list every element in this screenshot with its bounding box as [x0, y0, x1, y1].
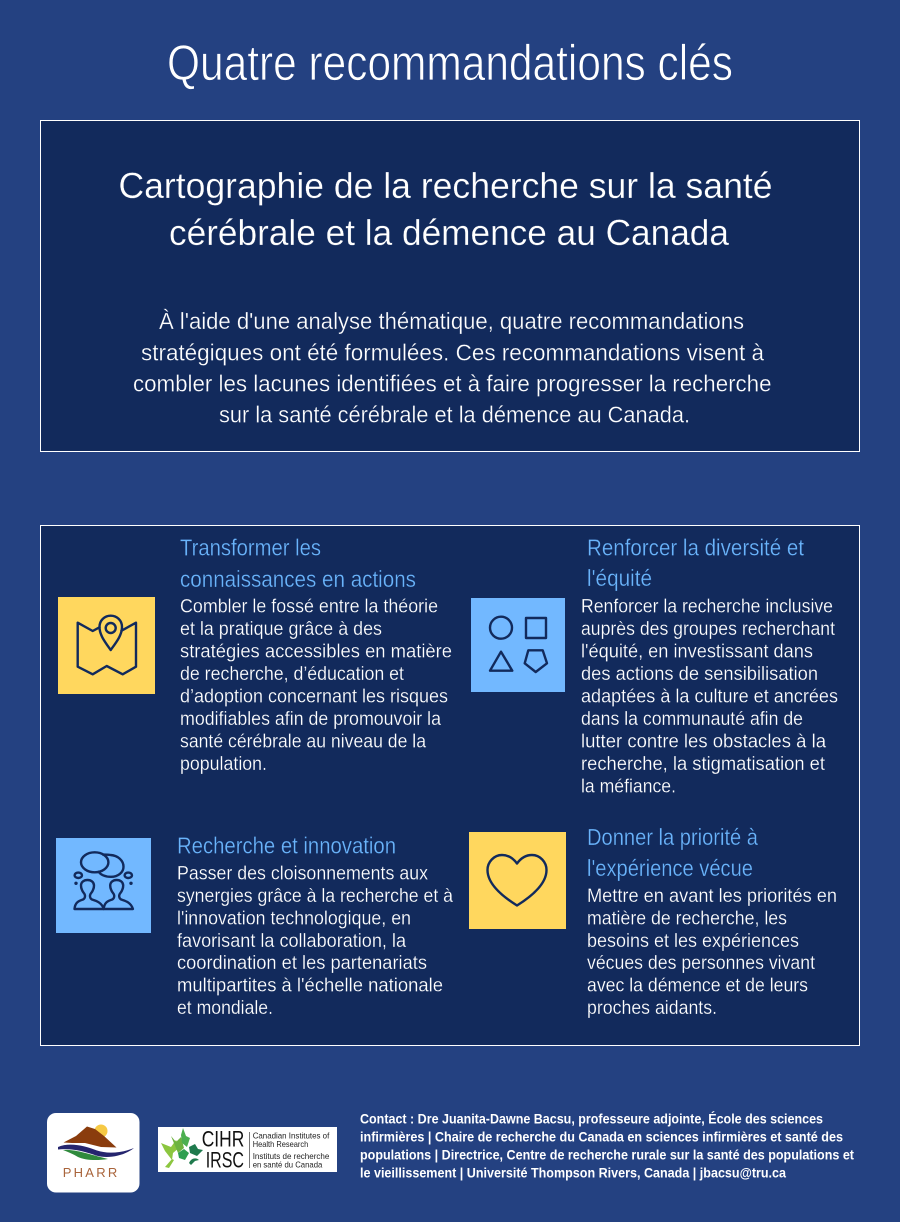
logo: PHARR: [47, 1113, 140, 1192]
text: recherche et innovation: coordination et les partenariats: [177, 952, 427, 974]
heading: expérience vécue: [587, 824, 759, 881]
text: diversité: lutter contre les obstacles à la: [581, 730, 826, 752]
recommendation 4: [469, 824, 837, 1019]
text: expérience vécue: proches aidants.: [587, 997, 717, 1019]
panel heading: [118, 165, 772, 253]
heading: expérience vécue: l'expérience vécue: [587, 855, 753, 881]
heading: transformer: connaissances en actions: [180, 566, 416, 592]
text: transformer: stratégies accessibles en matière: [180, 640, 452, 662]
text: transformer: [180, 596, 452, 775]
text: diversité: auprès des groupes recherchant: [581, 618, 836, 640]
text: expérience vécue: avec la démence et de leurs: [587, 974, 808, 996]
logo: CIHR IRSC: CIHR: [202, 1127, 244, 1152]
logo: CIHR IRSC: Instituts de recherche: [253, 1151, 330, 1161]
text: transformer: population.: [180, 753, 267, 775]
text: expérience vécue: [587, 885, 837, 1019]
heading: transformer: Transformer les: [180, 534, 321, 560]
text: expérience vécue: vécues des personnes vivant: [587, 952, 816, 974]
intro text block: À l'aide d'une analyse thématique, quatre recommandations: [159, 308, 744, 334]
panel heading: Cartographie de la recherche sur la santé: [118, 165, 772, 206]
contact text: [360, 1112, 854, 1180]
heading: diversité: l'équité: [587, 565, 652, 591]
icon: shapes: [471, 598, 565, 692]
title: Quatre recommandations clés: [167, 35, 733, 91]
text: diversité: dans la communauté afin de: [581, 708, 803, 730]
text: recherche et innovation: l'innovation technologique, en: [177, 908, 411, 930]
icon: people talking: [56, 838, 151, 933]
contact text: infirmières | Chaire de recherche du Canada en sciences infirmières et santé des: [360, 1130, 843, 1144]
logo: CIHR IRSC: IRSC: [206, 1148, 244, 1173]
text: diversité: recherche, la stigmatisation et: [581, 753, 826, 775]
text: expérience vécue: Mettre en avant les priorités en: [587, 885, 837, 907]
text: transformer: santé cérébrale au niveau de la: [180, 730, 426, 752]
heading: transformer: [180, 534, 416, 592]
intro text block: stratégiques ont été formulées. Ces recommandations visent à: [141, 340, 765, 366]
intro text block: combler les lacunes identifiées et à faire progresser la recherche: [133, 370, 772, 396]
text: diversité: l'équité, en investissant dans: [581, 640, 813, 662]
text: recherche et innovation: Passer des cloisonnements aux: [177, 862, 428, 884]
intro text block: [133, 308, 772, 428]
heading: recherche et innovation: Recherche et innovation: [177, 832, 396, 858]
text: diversité: adaptées à la culture et ancrées: [581, 686, 838, 708]
text: expérience vécue: besoins et les expériences: [587, 930, 799, 952]
panel: recommendations: [40, 526, 860, 1046]
logo: CIHR IRSC: [158, 1127, 337, 1173]
text: recherche et innovation: [177, 862, 453, 1019]
text: recherche et innovation: et mondiale.: [177, 997, 273, 1019]
contact text: Contact : Dre Juanita-Dawne Bacsu, professeure adjointe, École des sciences: [360, 1112, 823, 1126]
heading: expérience vécue: Donner la priorité à: [587, 824, 759, 850]
text: diversité: des actions de sensibilisation: [581, 663, 818, 685]
text: transformer: et la pratique grâce à des: [180, 618, 382, 640]
logo wordmark: PHARR: [63, 1165, 117, 1180]
logo: CIHR IRSC: en santé du Canada: [253, 1160, 323, 1170]
text: diversité: [581, 596, 838, 798]
recommendation 1: [58, 534, 452, 775]
text: recherche et innovation: favorisant la collaboration, la: [177, 930, 406, 952]
heading: diversité: Renforcer la diversité et: [587, 534, 804, 560]
icon: map with pin: [58, 597, 155, 694]
text: expérience vécue: matière de recherche, les: [587, 908, 787, 930]
panel: introduction: [40, 120, 860, 452]
text: recherche et innovation: multipartites à l'échelle nationale: [177, 974, 443, 996]
intro text block: sur la santé cérébrale et la démence au Canada.: [219, 402, 690, 428]
heading: diversité: [587, 534, 804, 591]
logo: CIHR IRSC: Canadian Institutes of: [253, 1130, 330, 1140]
text: transformer: de recherche, d’éducation et: [180, 663, 405, 685]
contact text: populations | Directrice, Centre de recherche rurale sur la santé des populations et: [360, 1148, 854, 1162]
panel heading: cérébrale et la démence au Canada: [169, 212, 730, 253]
text: diversité: la méfiance.: [581, 776, 676, 798]
icon: heart: [469, 832, 566, 929]
text: diversité: Renforcer la recherche inclusive: [581, 596, 833, 618]
recommendation 3: [56, 832, 453, 1019]
recommendation 2: [471, 534, 838, 798]
text: transformer: modifiables afin de promouvoir la: [180, 708, 441, 730]
contact text: le vieillissement | Université Thompson Rivers, Canada | jbacsu@tru.ca: [360, 1166, 786, 1180]
logo: CIHR IRSC: Health Research: [253, 1139, 309, 1149]
icon: maple leaf: [161, 1128, 203, 1168]
text: transformer: Combler le fossé entre la théorie: [180, 596, 438, 618]
text: recherche et innovation: synergies grâce à la recherche et à: [177, 885, 453, 907]
text: transformer: d’adoption concernant les risques: [180, 686, 448, 708]
